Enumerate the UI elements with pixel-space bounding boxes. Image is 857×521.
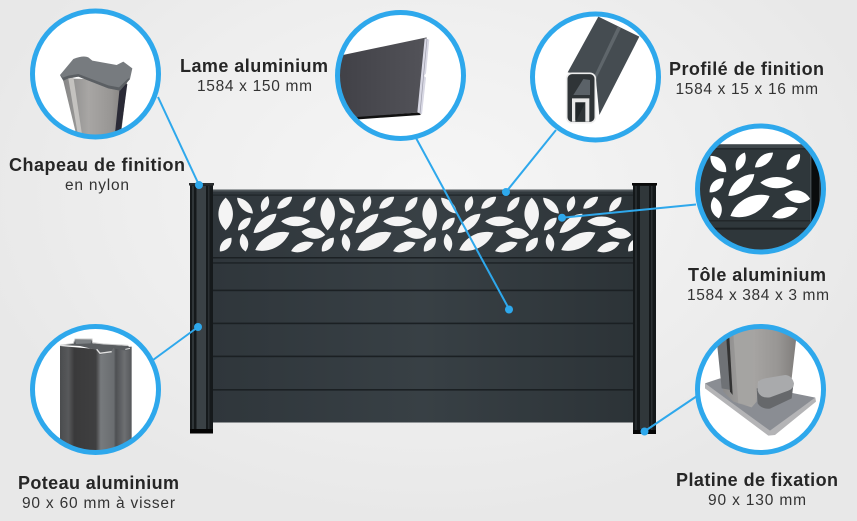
dot: profilé	[502, 188, 510, 196]
label: lame aluminium	[180, 56, 328, 95]
circle: tôle aluminium	[695, 124, 826, 254]
label: poteau aluminium: 90 x 60 mm à visser	[22, 495, 175, 512]
label: chapeau de finition: en nylon	[65, 177, 129, 194]
dot: tôle	[558, 214, 566, 222]
circle: chapeau de finition	[32, 11, 158, 143]
label: profilé de finition: 1584 x 15 x 16 mm	[676, 81, 818, 98]
circle: poteau aluminium	[32, 326, 158, 453]
label: chapeau de finition: Chapeau de finition	[9, 155, 185, 175]
circle: lame aluminium	[330, 12, 464, 138]
fence	[189, 183, 657, 434]
dot: chapeau	[195, 181, 203, 189]
leader dots	[194, 181, 648, 436]
label: tôle aluminium: 1584 x 384 x 3 mm	[687, 287, 829, 304]
dot: lame	[505, 306, 513, 314]
label: platine de fixation	[676, 470, 838, 509]
fence panel	[212, 190, 634, 422]
label: tôle aluminium: Tôle aluminium	[688, 265, 826, 285]
label: lame aluminium: Lame aluminium	[180, 56, 328, 76]
circle: profilé de finition	[532, 14, 658, 140]
leader lines	[153, 97, 697, 431]
label: platine de fixation: Platine de fixation	[676, 470, 838, 490]
label: profilé de finition: Profilé de finition	[669, 59, 824, 79]
dot: poteau	[194, 323, 202, 331]
circle: platine de fixation	[698, 320, 824, 452]
label: poteau aluminium	[18, 473, 179, 512]
label: profilé de finition	[669, 59, 824, 98]
label: tôle aluminium	[687, 265, 829, 304]
dot: platine	[640, 428, 648, 436]
label: chapeau de finition	[9, 155, 185, 194]
leader: profilé	[506, 130, 556, 192]
leader: lame	[416, 138, 509, 309]
leader: tôle	[562, 204, 696, 218]
right post	[632, 183, 657, 434]
label: lame aluminium: 1584 x 150 mm	[197, 78, 312, 95]
label: platine de fixation: 90 x 130 mm	[708, 492, 806, 509]
leader: chapeau	[158, 97, 199, 185]
leader: poteau	[153, 327, 198, 360]
label: poteau aluminium: Poteau aluminium	[18, 473, 179, 493]
leader: platine	[645, 396, 697, 431]
left post	[189, 183, 214, 434]
laser-cut leaf pattern	[217, 194, 643, 256]
